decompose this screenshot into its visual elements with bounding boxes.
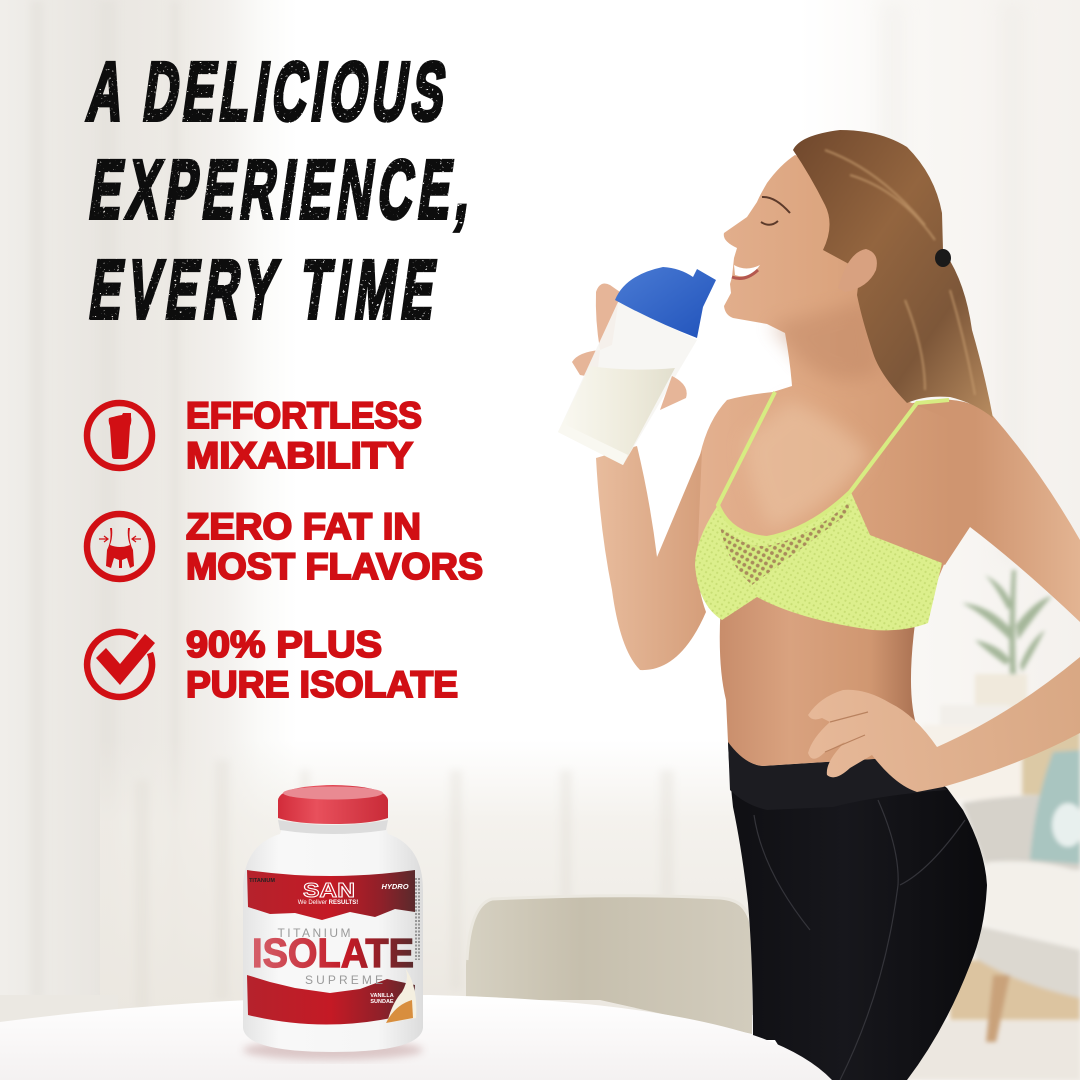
tub label: We Deliver RESULTS! [298,900,358,906]
title: EXPERIENCE, [84,144,477,236]
tub label: ISOLATE [252,930,414,976]
fingers behind shaker [572,284,620,378]
tub label: TITANIUM [249,878,275,884]
feature: pure isolate [87,624,458,705]
chest, neck and head skin [695,155,950,612]
icon: check [87,632,155,697]
text: pure isolate [186,624,458,705]
brand: SAN [303,880,355,902]
chest highlight [745,400,870,530]
text: zero fat: MOST FLAVORS [186,546,483,587]
leggings [728,741,987,1080]
text: effortless mixability [186,395,422,476]
title: EVERY TIME [84,244,441,336]
woman with shaker [558,130,1080,1080]
tub label [247,870,419,1025]
chair [466,896,752,1034]
hair [793,130,993,418]
text: pure isolate: PURE ISOLATE [186,664,458,705]
feature: zero fat [87,506,483,587]
shaker [558,267,716,465]
feature: effortless mixability [87,395,422,476]
text: pure isolate: 90% PLUS [186,624,382,665]
title: A DELICIOUS [82,46,452,138]
waistband [728,741,947,810]
sports bra [695,490,942,630]
icon: shaker [87,403,152,468]
tub label: SUNDAE [370,999,394,1005]
torso skin [720,590,920,766]
raised arm [596,446,706,670]
neck shadow [770,300,880,380]
icon: waist [87,514,152,579]
title [82,46,477,336]
hair tie [935,249,951,267]
tub label: TITANIUM [278,926,350,940]
room: floor, sofa, plant, cabinet [905,570,1080,1080]
tub label: SUPREME [305,973,383,987]
table [0,995,832,1080]
text: zero fat: ZERO FAT IN [186,506,421,547]
right arm upper [860,400,1080,622]
tub lid [278,785,388,834]
tub label: HYDRO [381,882,409,891]
product tub [243,785,423,1060]
text: zero fat [186,506,483,587]
text: effortless mixability: EFFORTLESS [186,395,422,436]
tub label: VANILLA [370,993,394,999]
face details [761,197,790,225]
text: effortless mixability: MIXABILITY [186,435,413,476]
ear [838,249,877,292]
hip arm and hand [808,657,1080,792]
